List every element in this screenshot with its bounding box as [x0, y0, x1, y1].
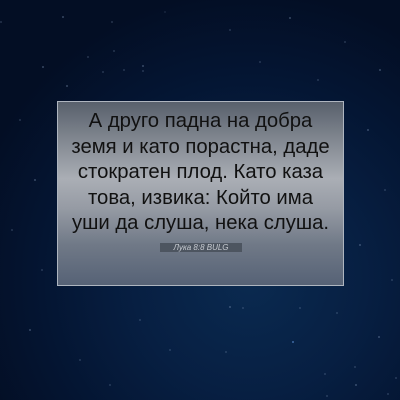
verse reference label — [160, 243, 242, 252]
verse text: уши да слуша, нека слуша. — [72, 212, 329, 234]
verse text — [71, 110, 330, 234]
verse text: това, извика: Който има — [88, 186, 313, 208]
verse text: земя и като порастна, даде — [71, 136, 330, 158]
verse text: А друго падна на добра — [89, 110, 312, 132]
verse text: стократен плод. Като каза — [78, 161, 323, 183]
verse reference label: Лука 8:8 BULG — [173, 243, 229, 252]
panel: verse card — [57, 101, 344, 286]
